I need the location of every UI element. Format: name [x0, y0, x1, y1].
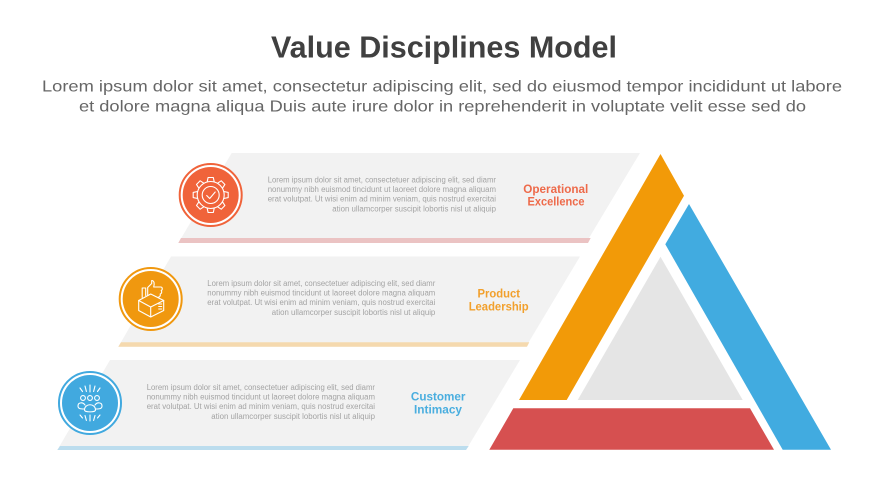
panel background [118, 256, 580, 347]
body text: ation ullamcorper suscipit lobortis nisl ut aliquip [211, 412, 376, 421]
body text: nonummy nibh euismod tincidunt ut laoreet dolore magna aliquam [207, 288, 436, 298]
label [411, 392, 466, 417]
body text: nonummy nibh euismod tincidunt ut laoreet dolore magna aliquam [147, 392, 375, 402]
subtitle text: Lorem ipsum dolor sit amet, consectetur adipiscing elit, sed do eiusmod tempor incididunt ut labore [42, 78, 842, 96]
segment: orange side [519, 154, 684, 400]
body text: erat volutpat. Ut wisi enim ad minim veniam, quis nostrud exercitai [268, 195, 496, 204]
label: Leadership [469, 302, 529, 314]
label [523, 184, 588, 209]
body text [268, 175, 497, 213]
panel: operational excellence [178, 153, 640, 243]
label: Excellence [528, 197, 584, 209]
icon: gear with check [180, 164, 242, 226]
accent bar [118, 342, 529, 347]
segment: blue side [665, 204, 831, 450]
body text: nonummy nibh euismod tincidunt ut laoreet dolore magna aliquam [268, 185, 496, 194]
label: Customer [411, 392, 466, 404]
subtitle text [42, 78, 842, 116]
triangle diagram [489, 154, 831, 450]
body text: Lorem ipsum dolor sit amet, consectetuer adipiscing elit, sed diamr [268, 175, 496, 184]
icon: box with thumbs up [120, 268, 182, 330]
icon: group of people [59, 372, 121, 434]
body text: erat volutpat. Ut wisi enim ad minim veniam, quis nostrud exercitai [147, 402, 375, 411]
body text [147, 383, 376, 421]
subtitle text: et dolore magna aliqua Duis aute irure dolor in reprehenderit in voluptate velit esse sed do [79, 98, 806, 116]
body text [207, 279, 436, 317]
body text: ation ullamcorper suscipit lobortis nisl ut aliquip [272, 308, 436, 317]
label: Intimacy [414, 405, 463, 417]
label: Product [478, 289, 520, 301]
panel: customer intimacy [57, 360, 520, 450]
label [469, 289, 529, 314]
segment: grey center [578, 257, 743, 400]
panel: product leadership [118, 256, 580, 347]
body text: Lorem ipsum dolor sit amet, consectetuer adipiscing elit, sed diamr [207, 279, 436, 288]
body text: erat volutpat. Ut wisi enim ad minim veniam, quis nostrud exercitai [207, 298, 436, 307]
panel background [57, 360, 520, 450]
panel background [178, 153, 640, 243]
segment: red base [489, 408, 774, 450]
accent bar [57, 446, 469, 450]
label: Operational [523, 184, 588, 196]
body text: Lorem ipsum dolor sit amet, consectetuer adipiscing elit, sed diamr [147, 383, 375, 392]
title: Value Disciplines Model [271, 30, 617, 64]
body text: ation ullamcorper suscipit lobortis nisl ut aliquip [332, 204, 497, 213]
accent bar [178, 238, 591, 243]
